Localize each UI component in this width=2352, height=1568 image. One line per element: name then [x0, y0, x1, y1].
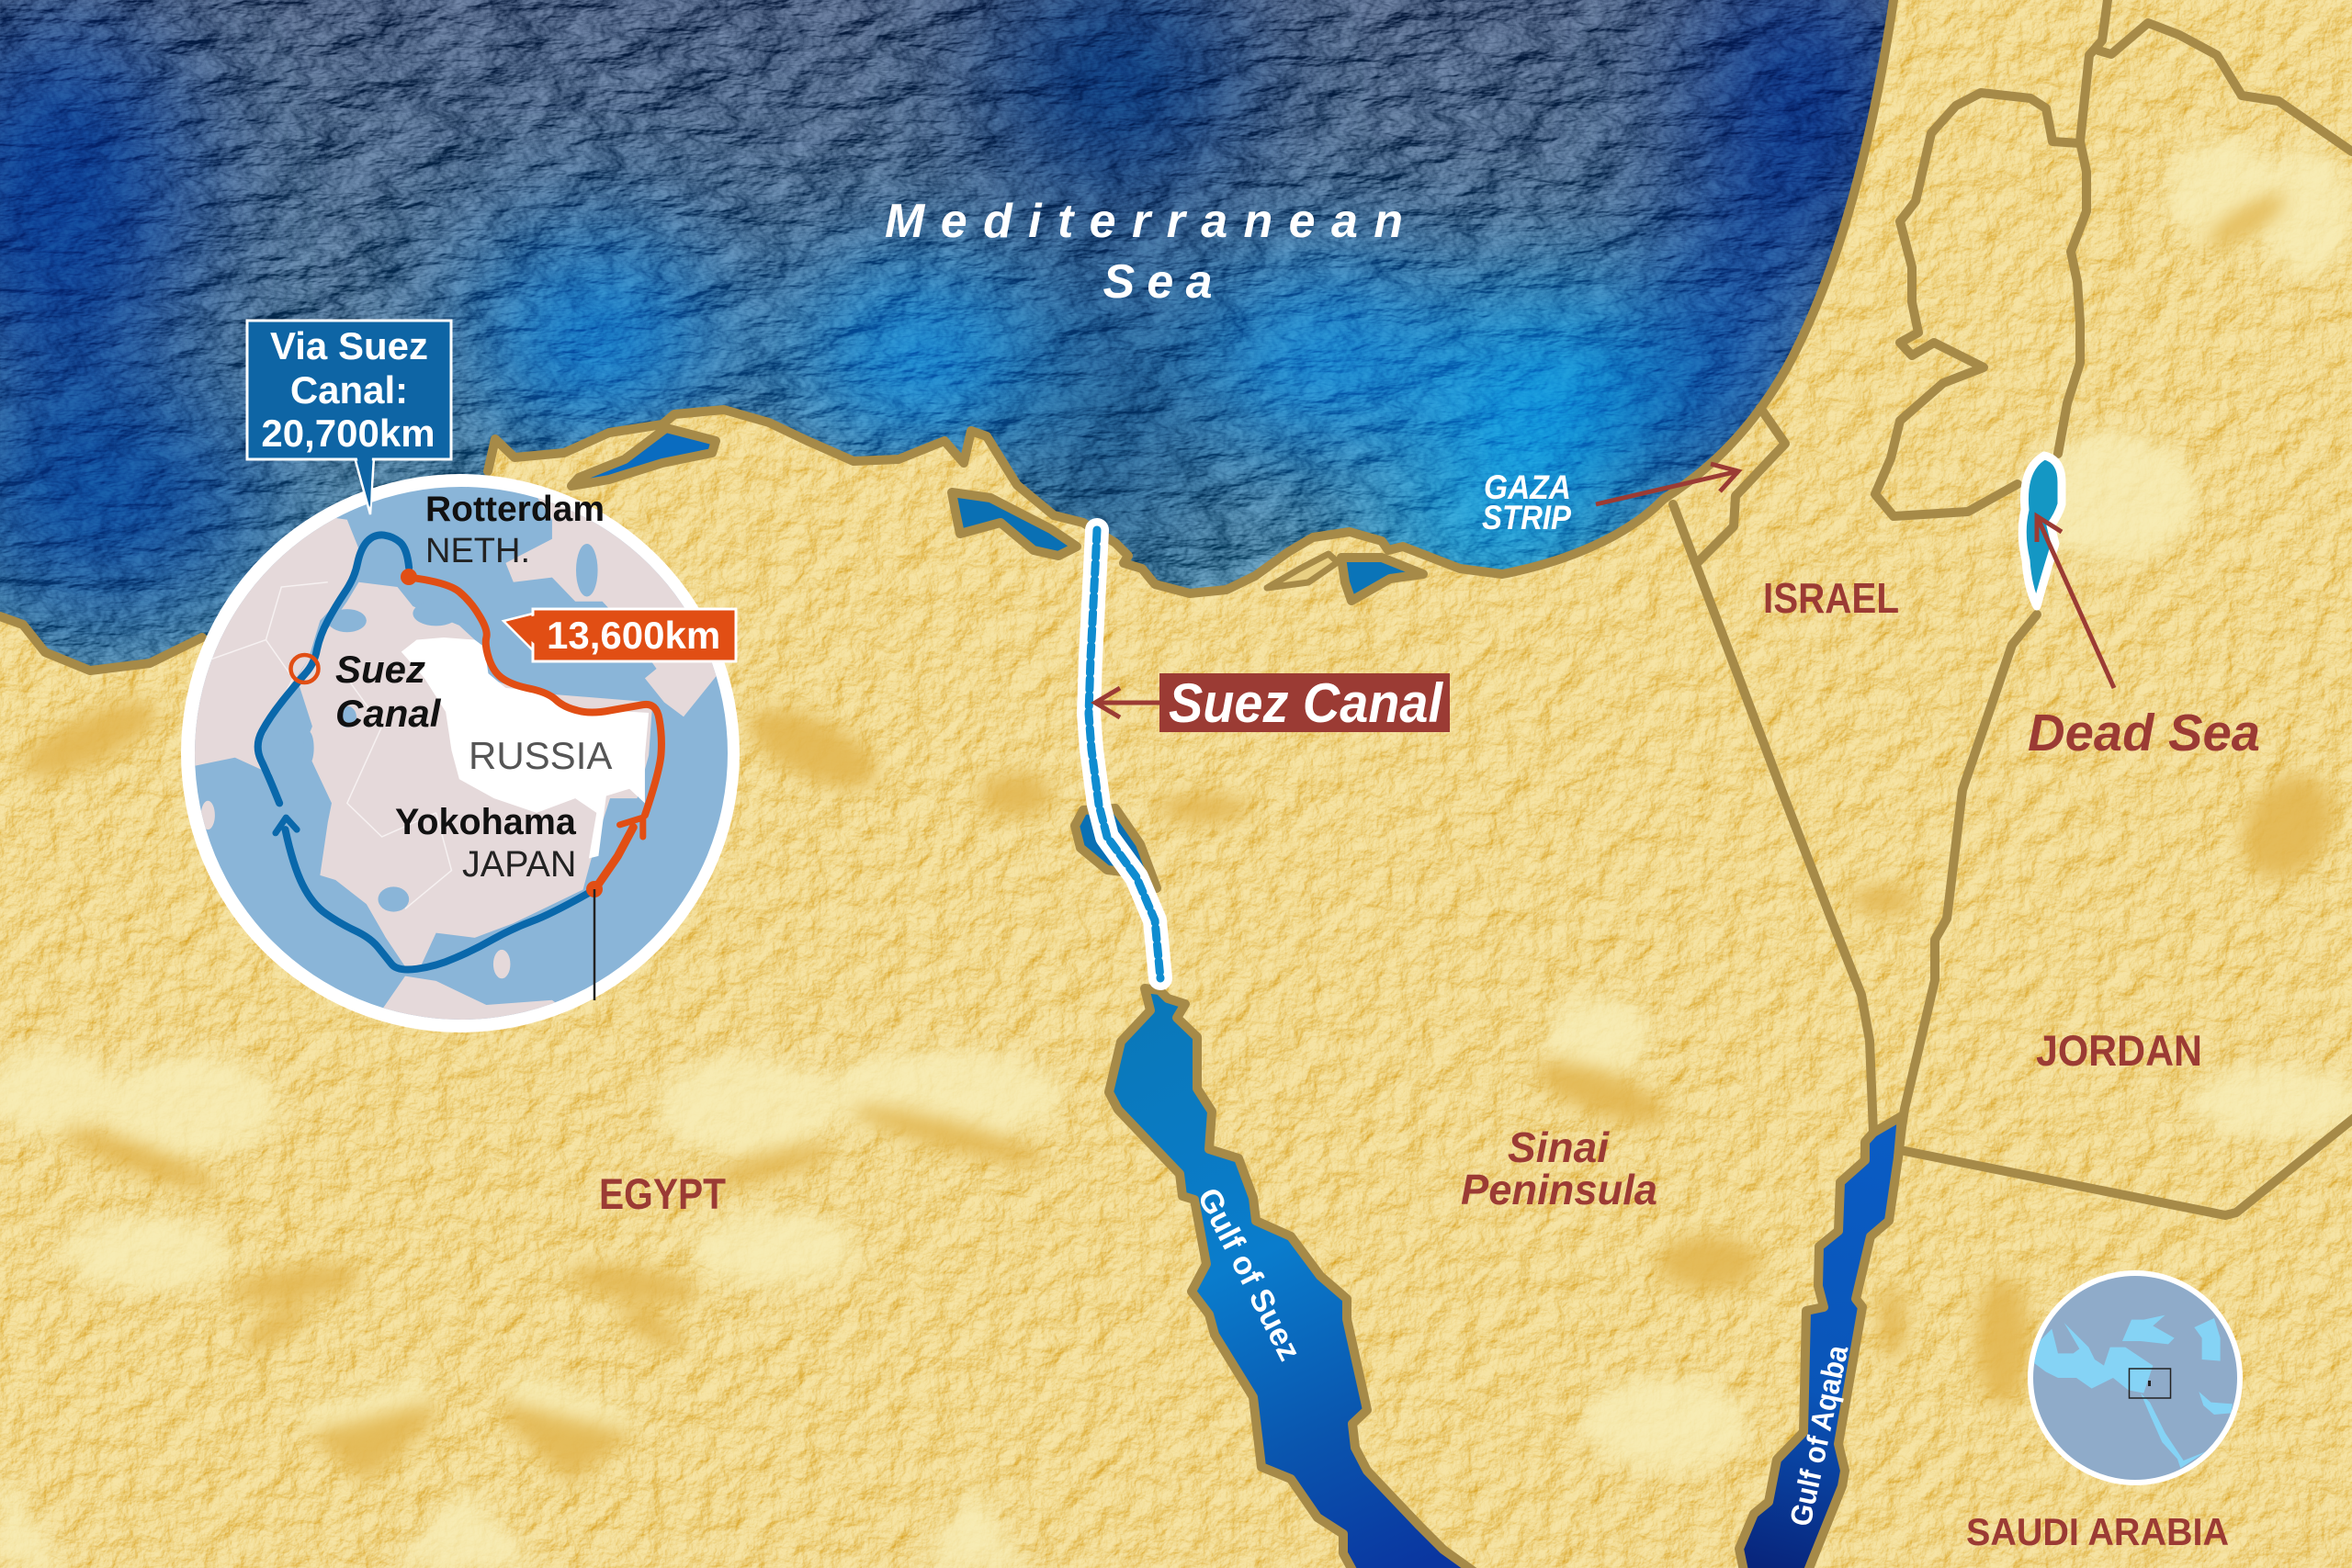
- Gulf of Suez: [1109, 988, 1479, 1568]
- label: Sinai Peninsula: Sinai: [1508, 1123, 1610, 1171]
- sea label: [885, 195, 1403, 309]
- callout: via Suez Canal distance: [247, 321, 451, 514]
- arrow: Dead Sea: [2037, 516, 2114, 688]
- marker: Rotterdam: [401, 569, 417, 585]
- sea label: Mediterranean: [885, 195, 1403, 248]
- marker: Suez Canal ring: [290, 655, 318, 682]
- Suez Canal route: [1089, 530, 1160, 978]
- label: Gulf of Suez: Gulf of Suez: [1191, 1182, 1307, 1366]
- label: Yokohama: Yokohama: [395, 802, 577, 842]
- lake near western delta: [571, 428, 716, 486]
- callout: via Suez Canal distance: Via Suez: [270, 324, 428, 367]
- callout: via Suez Canal distance: Canal:: [290, 368, 408, 412]
- label: Dead Sea: Dead Sea: [2028, 704, 2260, 762]
- panel: shipping routes globe: [173, 321, 740, 1043]
- Gulf of Aqaba: [1739, 1116, 1902, 1568]
- arrow: Gaza Strip: [1596, 464, 1738, 504]
- locator dot: [2148, 1381, 2151, 1386]
- label: Netherlands: NETH.: [425, 532, 530, 570]
- panel: locator inset globe: [2028, 1270, 2243, 1485]
- borders: [1673, 0, 2352, 1215]
- label: Suez Canal: Suez Canal: [1169, 672, 1443, 734]
- label: Egypt: EGYPT: [599, 1169, 726, 1218]
- label: Suez Canal on globe: Canal: [335, 692, 442, 735]
- lake Manzala: [952, 492, 1077, 556]
- label: Suez Canal on globe: Suez: [335, 648, 425, 691]
- label: Suez Canal on globe: [335, 648, 442, 735]
- lagoon east of canal: [1341, 558, 1423, 601]
- label: Jordan: JORDAN: [2036, 1026, 2202, 1075]
- Dead Sea: [2022, 456, 2062, 606]
- label: Gulf of Aqaba: Gulf of Aqaba: [1783, 1342, 1855, 1529]
- country borders on globe: [212, 582, 451, 908]
- label: Russia: RUSSIA: [469, 734, 612, 777]
- callout: via Suez Canal distance: 20,700km: [261, 412, 435, 455]
- label: Gaza Strip: [1482, 468, 1571, 536]
- label: Israel: ISRAEL: [1763, 574, 1899, 622]
- label: Sinai Peninsula: [1461, 1123, 1657, 1213]
- arrow: Suez Canal: [1095, 688, 1159, 717]
- lake Timsah: [1075, 808, 1157, 888]
- label: Rotterdam: Rotterdam: [425, 490, 605, 529]
- label: Sinai Peninsula: Peninsula: [1461, 1166, 1657, 1213]
- label: Gaza Strip: STRIP: [1482, 499, 1571, 536]
- marker: Yokohama: [586, 881, 603, 897]
- leader line: [594, 889, 595, 1000]
- label: Gaza Strip: GAZA: [1484, 468, 1571, 506]
- sea label: Sea: [1102, 255, 1213, 309]
- Mediterranean Sea: [0, 0, 1929, 698]
- callout: Arctic route distance: [503, 609, 736, 661]
- lagoon Bardawil sliver: [1267, 554, 1338, 588]
- callout: Arctic route distance: 13,600km: [547, 614, 720, 657]
- label: Saudi Arabia: SAUDI ARABIA: [1966, 1510, 2229, 1553]
- locator box: [2130, 1369, 2170, 1398]
- label: Japan: JAPAN: [462, 844, 576, 885]
